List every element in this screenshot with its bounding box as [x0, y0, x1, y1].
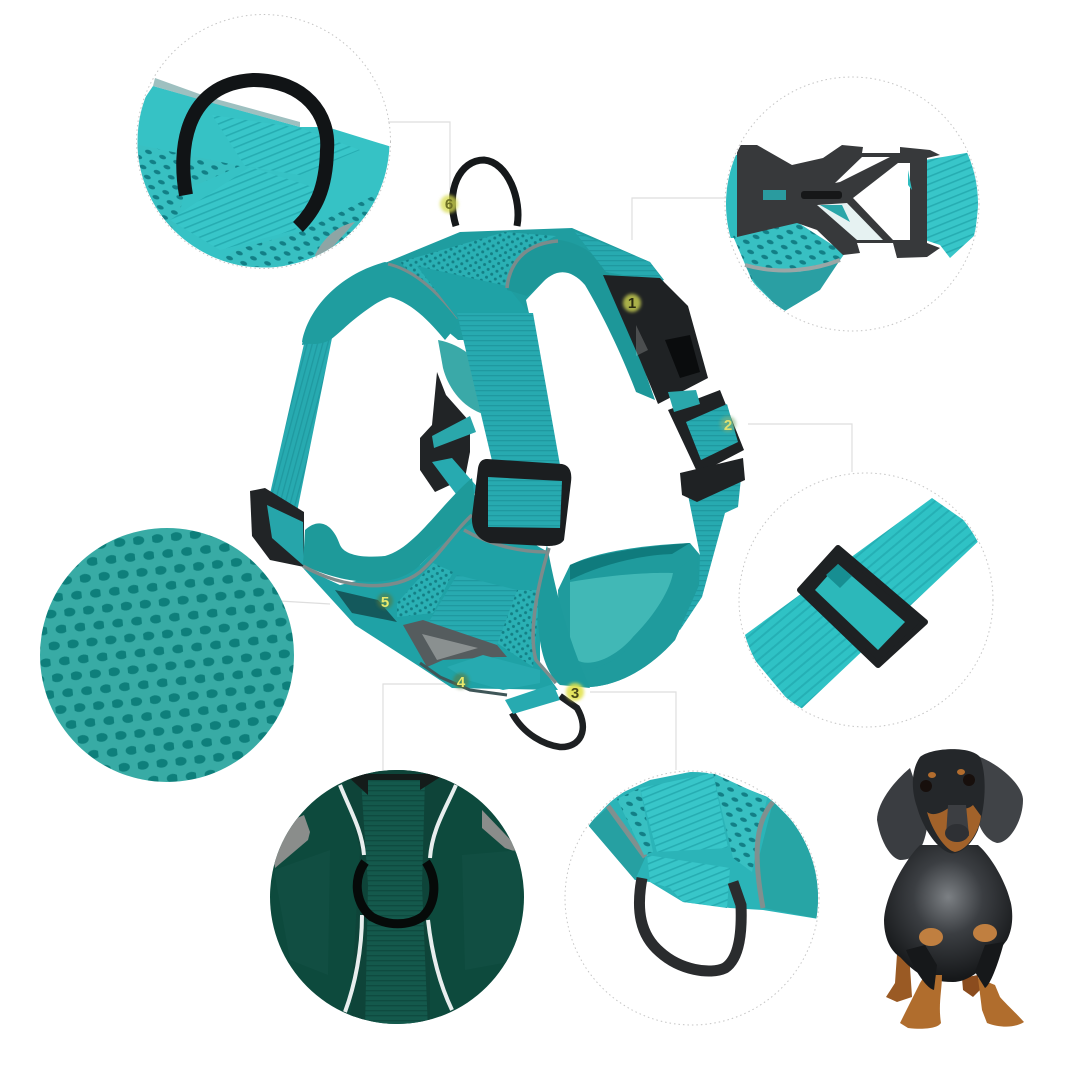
harness	[250, 160, 745, 747]
callout numbers	[377, 195, 736, 702]
detail circle: adjuster slider	[745, 498, 978, 708]
detail circle outline: top handle	[136, 14, 390, 268]
dog photo illustration	[877, 749, 1024, 1029]
side adjuster slider	[668, 390, 745, 502]
top mesh and left padding	[302, 228, 664, 345]
top handle ring	[452, 160, 518, 226]
number 4	[453, 673, 469, 691]
leader lines	[280, 122, 852, 770]
back pad inner	[438, 340, 490, 415]
number 4: 4	[457, 674, 466, 691]
centre slider buckle	[472, 459, 571, 546]
number 5	[377, 593, 393, 611]
head	[913, 749, 985, 853]
number 6	[440, 195, 458, 213]
number 3: 3	[571, 685, 579, 702]
bottom D-ring	[505, 684, 583, 747]
detail circle: front ring, dark view	[270, 770, 524, 1024]
number 2	[720, 416, 736, 434]
detail circle outline: bottom D-ring	[565, 771, 819, 1025]
number 5: 5	[381, 594, 389, 611]
detail circle: top handle	[138, 73, 390, 268]
number 1: 1	[628, 295, 636, 312]
body	[884, 845, 1012, 982]
right chest padding	[558, 543, 700, 687]
left buckle	[250, 488, 304, 567]
ears	[877, 768, 928, 860]
number 2: 2	[724, 417, 732, 434]
detail circle outline: adjuster slider	[739, 473, 993, 727]
number 3	[566, 683, 584, 702]
chest curved padding	[303, 478, 478, 582]
chest logo patch	[403, 620, 507, 667]
lower chest strap	[447, 655, 540, 690]
detail circle: side buckle	[726, 145, 978, 311]
right padding arch	[507, 240, 655, 400]
back legs	[886, 940, 912, 1002]
centre strap	[457, 313, 560, 465]
right strap lower	[665, 478, 741, 630]
back buckle and strap	[420, 372, 480, 502]
number 6: 6	[445, 196, 453, 213]
detail circle: breathable mesh	[40, 528, 294, 782]
number 1	[623, 294, 641, 312]
chest panel	[303, 510, 558, 690]
detail circle outline: side buckle	[725, 77, 979, 331]
left strap	[267, 335, 332, 517]
chest tan markings	[919, 928, 943, 946]
side release buckle	[603, 275, 708, 404]
front legs	[900, 975, 942, 1029]
detail circle: bottom D-ring	[588, 772, 818, 976]
